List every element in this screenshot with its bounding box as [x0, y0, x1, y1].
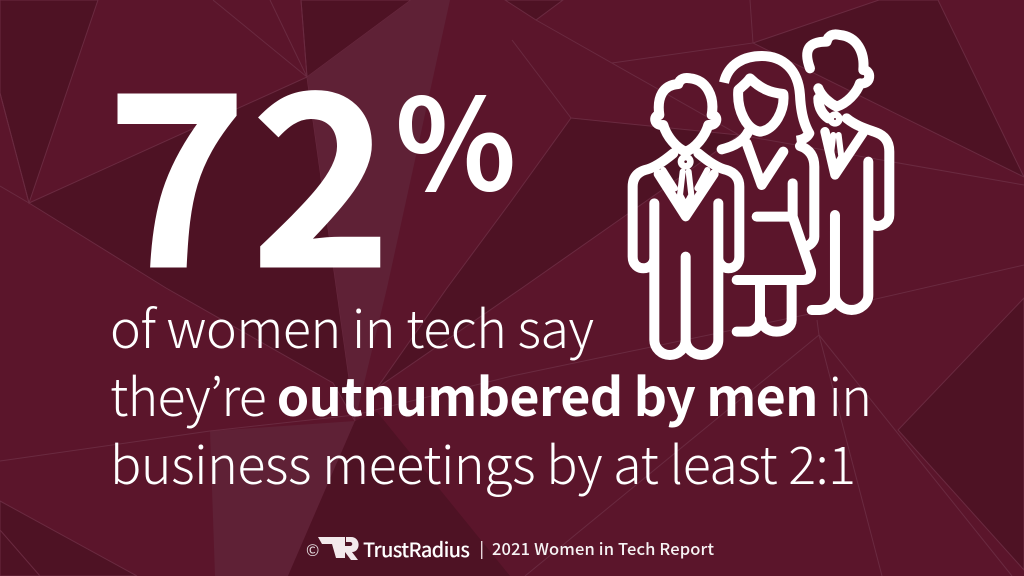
- big statistic: 72%: [106, 0, 516, 337]
- report title: 2021 Women in Tech Report: [492, 536, 714, 560]
- headline text block: [110, 288, 872, 499]
- icon: three business people: [633, 34, 889, 355]
- headline text block: of women in tech say: [110, 288, 594, 363]
- separator: [481, 541, 482, 559]
- copyright mark: ©: [306, 537, 319, 561]
- front man: [633, 78, 739, 355]
- TrustRadius logo mark: [318, 537, 359, 560]
- woman: [722, 56, 814, 332]
- headline text block: business meetings by at least 2:1: [110, 424, 856, 499]
- back man: [807, 34, 889, 310]
- footer: logo and report name: [306, 534, 714, 563]
- big statistic: 72%: %: [395, 45, 516, 227]
- brand name: TrustRadius: [363, 534, 470, 563]
- headline text block: they’re outnumbered by men in: [110, 356, 872, 431]
- big statistic: 72%: 72: [106, 0, 392, 337]
